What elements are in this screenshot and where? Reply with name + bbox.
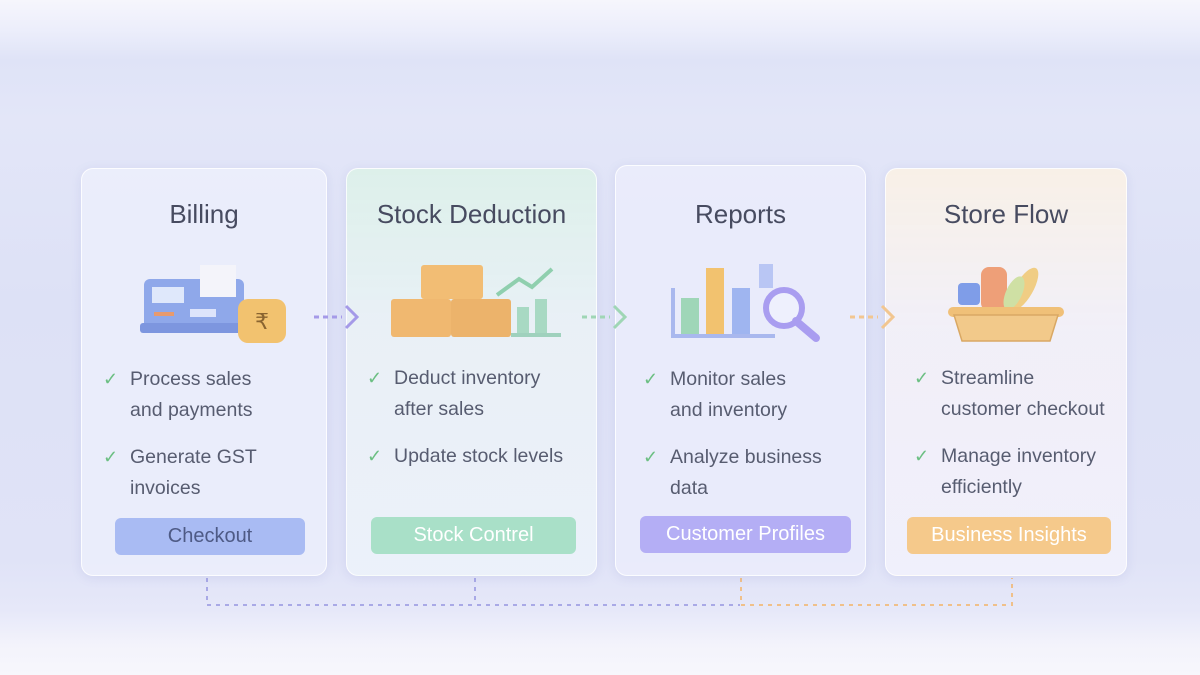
icon: basket <box>948 267 1064 342</box>
arrow 1 <box>314 305 359 329</box>
panel: stock deduction: Update stock levels <box>394 445 563 467</box>
panel: reports: ✓ <box>643 369 658 389</box>
bullets <box>103 368 252 421</box>
heading: Store Flow <box>944 199 1068 229</box>
bullets: Streamline <box>941 367 1034 389</box>
panel: stock deduction <box>346 168 597 576</box>
panel: store flow <box>885 168 1127 576</box>
heading: Stock Deduction <box>377 199 566 229</box>
heading: billing: Billing <box>169 199 239 229</box>
panel: billing: ✓ <box>103 369 118 389</box>
panel: billing <box>81 168 327 576</box>
button <box>371 517 576 554</box>
panel: stock deduction: ✓ <box>367 368 382 388</box>
button: Business Insights <box>931 524 1087 546</box>
panel: store flow: ✓ <box>914 446 929 466</box>
bullets: Process sales <box>130 368 251 390</box>
panel: billing: Generate GST <box>130 446 257 468</box>
panel: store flow: ✓ <box>914 368 929 388</box>
panel: store flow: efficiently <box>941 476 1022 498</box>
icon: cash register: ₹ <box>255 309 269 334</box>
bullets: and payments <box>130 399 252 421</box>
button: checkout: Checkout <box>168 525 252 547</box>
bullets <box>914 367 1105 420</box>
bullets <box>367 367 540 420</box>
arrow 2 <box>582 305 627 329</box>
panel: billing: invoices <box>130 477 200 499</box>
panel: reports: data <box>670 477 708 499</box>
bullets: after sales <box>394 398 484 420</box>
button: Stock Contrel <box>413 524 534 546</box>
icon: cash register <box>140 265 286 343</box>
bullets <box>643 368 787 421</box>
panel: reports <box>615 165 866 576</box>
panel: billing: ✓ <box>103 447 118 467</box>
panel: reports: ✓ <box>643 447 658 467</box>
button: Customer Profiles <box>666 523 825 545</box>
bullets: and inventory <box>670 399 787 421</box>
icon: boxes <box>391 265 561 337</box>
panel: store flow: Manage inventory <box>941 445 1096 467</box>
bullets: customer checkout <box>941 398 1105 420</box>
arrow 3 <box>850 305 895 329</box>
button <box>907 517 1111 554</box>
button <box>640 516 851 553</box>
bullets: Deduct inventory <box>394 367 540 389</box>
panel: stock deduction: ✓ <box>367 446 382 466</box>
bullets: Monitor sales <box>670 368 786 390</box>
button: checkout <box>115 518 305 555</box>
heading: Reports <box>695 199 786 229</box>
panel: reports: Analyze business <box>670 446 822 468</box>
icon: chart magnifier <box>671 264 820 342</box>
